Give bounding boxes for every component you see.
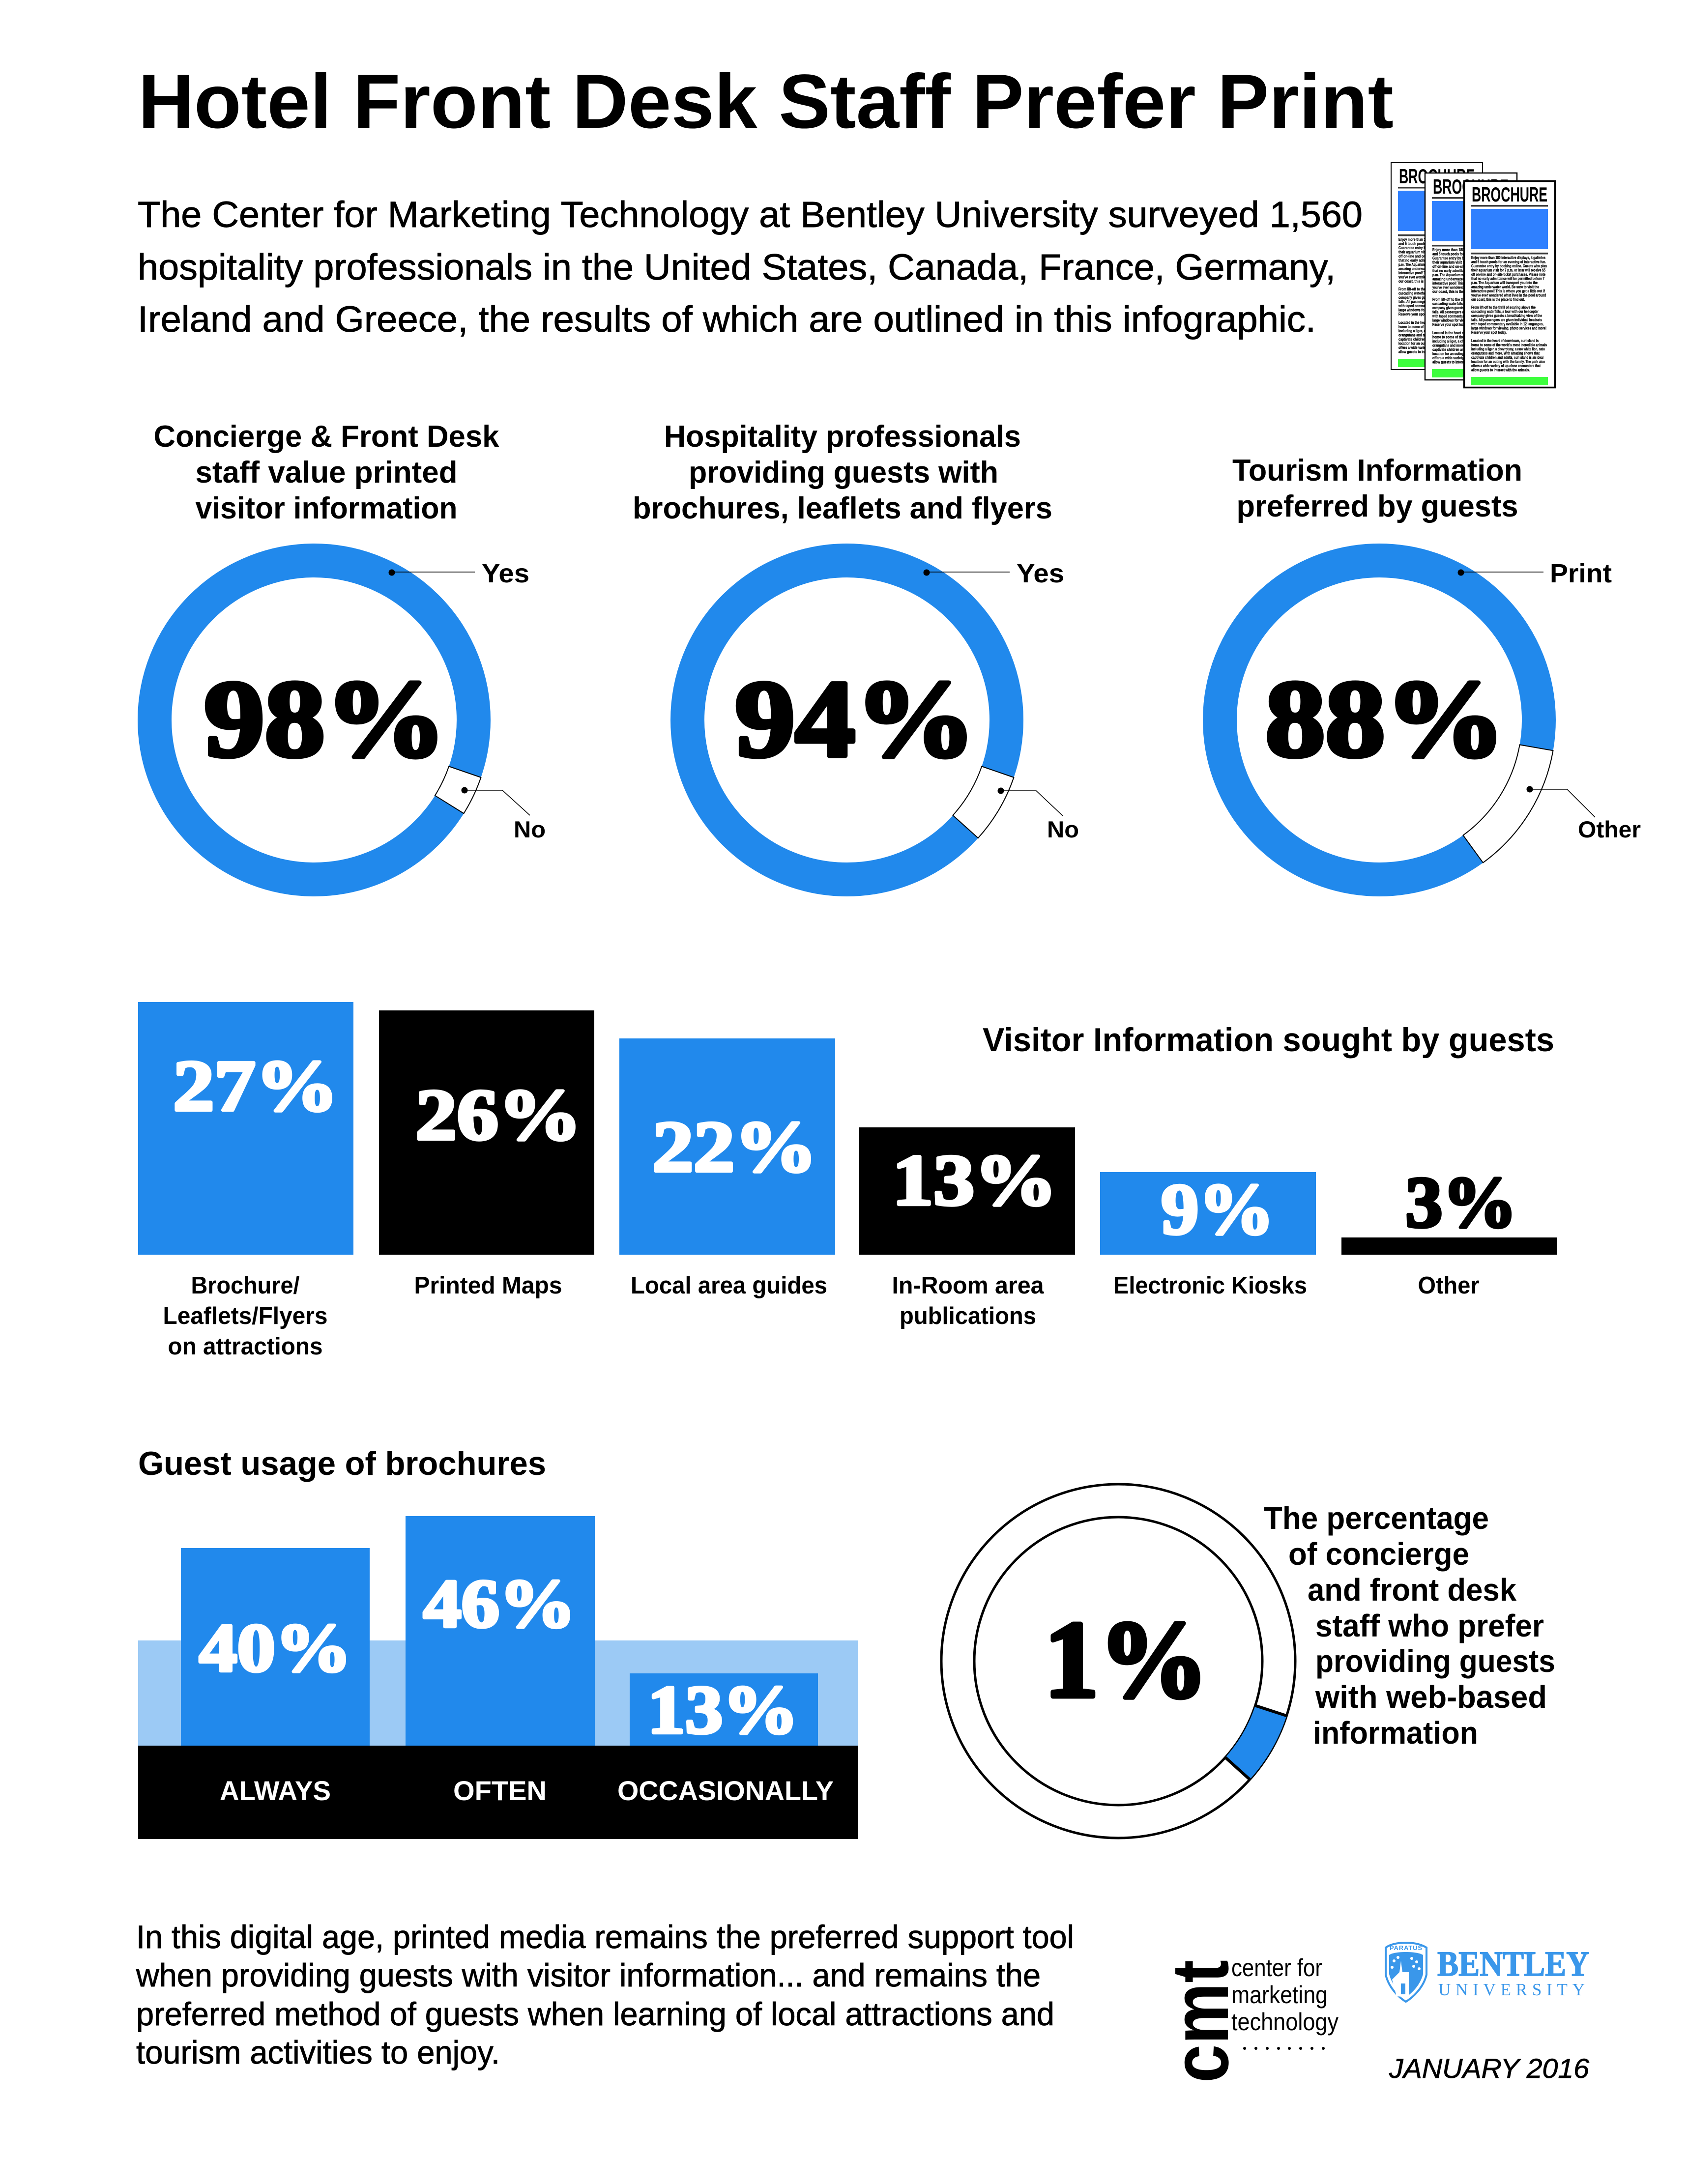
icon: front brochure: large windows for viewing, photo services and more! bbox=[1471, 325, 1546, 330]
icon: back brochure: home to some of t bbox=[1398, 324, 1426, 329]
icon: back brochure: From lift-off to the bbox=[1398, 287, 1426, 291]
logo: center for marketing technology: center for bbox=[1231, 1954, 1322, 1982]
panel: visitor information bar chart bbox=[138, 1002, 1557, 1360]
value 88%: 88% bbox=[1265, 658, 1505, 780]
icon: middle brochure: falls. All passengers a bbox=[1432, 310, 1464, 315]
bar: always 40%: ALWAYS bbox=[220, 1775, 331, 1806]
callout: other bbox=[1527, 786, 1641, 842]
icon: front brochure: Reserve your spot today. bbox=[1471, 330, 1507, 335]
description text: information bbox=[1313, 1715, 1478, 1751]
icon: back brochure: location for an out bbox=[1398, 341, 1426, 346]
bar labels: publications bbox=[900, 1303, 1036, 1329]
heading: tourism information bbox=[1232, 454, 1522, 523]
bar: 13% in-room bbox=[859, 1127, 1075, 1255]
icon: middle brochure: and 5 touch pools for bbox=[1432, 252, 1464, 257]
icon: back brochure: falls. All passenge bbox=[1398, 299, 1426, 304]
logo: center for marketing technology: marketing bbox=[1231, 1981, 1328, 2009]
callout: no: No bbox=[514, 816, 546, 842]
callout: other: Other bbox=[1578, 816, 1641, 842]
date: JANUARY 2016 bbox=[1389, 2053, 1590, 2084]
icon: middle brochure: From lift-off to the th bbox=[1432, 297, 1464, 302]
icon: middle brochure: including a liger, a ch bbox=[1432, 339, 1464, 344]
description text: providing guests bbox=[1315, 1643, 1555, 1679]
icon: middle brochure: interactive pool! This bbox=[1432, 281, 1464, 286]
icon: front brochure: home to some of the world's most incredible animals bbox=[1471, 342, 1547, 347]
description text: of concierge bbox=[1288, 1536, 1469, 1572]
intro text block bbox=[138, 194, 1363, 340]
bar: always 40% bbox=[181, 1548, 370, 1806]
heading: hospitality professionals: providing guests with bbox=[689, 456, 998, 489]
icon: middle brochure: BROCHURE bbox=[1433, 175, 1509, 198]
heading: guest usage: Guest usage of brochures bbox=[138, 1445, 546, 1482]
bar: occasionally 13%: OCCASIONALLY bbox=[617, 1775, 834, 1806]
bar: 3% other bbox=[1341, 1162, 1557, 1255]
icon: front brochure: with taped commentary available in 12 languages, bbox=[1471, 321, 1543, 326]
icon: back brochure: their aquarium vis bbox=[1398, 250, 1426, 255]
icon: middle brochure: home to some of the bbox=[1432, 334, 1464, 339]
icon: middle brochure: Guarantee entry by b bbox=[1432, 256, 1464, 260]
description text: staff who prefer bbox=[1315, 1608, 1544, 1643]
heading: hospitality professionals: Hospitality professionals bbox=[664, 420, 1021, 454]
bar labels: on attractions bbox=[168, 1333, 322, 1360]
callout: no bbox=[461, 787, 546, 842]
bar: occasionally 13% bbox=[617, 1672, 834, 1806]
icon: bentley shield bbox=[1386, 1943, 1426, 2002]
icon: back brochure: allow guests to int bbox=[1398, 349, 1426, 354]
callout: yes bbox=[923, 559, 1064, 588]
bar labels: In-Room area bbox=[892, 1272, 1044, 1299]
panel: guest usage of brochures bbox=[138, 1445, 858, 1839]
intro text block: The Center for Marketing Technology at Bentley University surveyed 1,560 bbox=[138, 194, 1363, 235]
icon: middle brochure: cascading waterfalls, bbox=[1432, 301, 1464, 306]
icon: middle brochure: you've ever wondered bbox=[1432, 285, 1464, 290]
value 94%: 94% bbox=[735, 658, 976, 780]
icon: middle brochure: off on-line and on-sit bbox=[1432, 264, 1464, 269]
icon: front brochure: BROCHURE bbox=[1472, 183, 1547, 206]
icon: back brochure: company gives gu bbox=[1398, 295, 1426, 300]
icon: back brochure: Reserve your spot bbox=[1398, 312, 1426, 316]
bar labels: Printed Maps bbox=[414, 1272, 562, 1299]
bar: always 40%: 40% bbox=[199, 1610, 351, 1686]
icon: back brochure: Located in the hea bbox=[1398, 320, 1426, 325]
heading: tourism information: Tourism Information bbox=[1232, 454, 1522, 488]
description text: with web-based bbox=[1315, 1679, 1547, 1715]
heading: concierge and front desk: Concierge & Front Desk bbox=[153, 420, 499, 454]
icon: back brochure: BROCHURE bbox=[1399, 165, 1475, 188]
icon: back brochure: that no early adm bbox=[1398, 258, 1426, 262]
icon: front brochure bbox=[1464, 181, 1555, 387]
background band bbox=[138, 1640, 858, 1746]
bar: 27% brochures bbox=[138, 1002, 353, 1255]
donut chart 98% bbox=[154, 560, 481, 880]
icon: middle brochure: captivate children an bbox=[1432, 347, 1464, 352]
base strip bbox=[138, 1746, 858, 1839]
heading: concierge and front desk bbox=[153, 420, 499, 525]
description text bbox=[1264, 1500, 1555, 1751]
icon: front brochure: Located in the heart of downtown, our island is bbox=[1471, 338, 1539, 343]
bar: 9% kiosks: 9% bbox=[1161, 1169, 1274, 1250]
callout: print: Print bbox=[1550, 559, 1612, 588]
description text: and front desk bbox=[1308, 1572, 1516, 1608]
value 98%: 98% bbox=[204, 658, 446, 780]
donut chart 94% bbox=[687, 560, 1014, 880]
icon: front brochure: off on-line and on-site ticket purchases. Please note bbox=[1471, 272, 1545, 277]
icon: front brochure: location for an outing with the family. The park also bbox=[1471, 359, 1545, 364]
bar labels bbox=[163, 1272, 1480, 1360]
bar labels: Local area guides bbox=[631, 1272, 827, 1299]
description text: The percentage bbox=[1264, 1500, 1489, 1536]
panel: hospitality professionals donut bbox=[633, 420, 1079, 880]
bar: 27% brochures: 27% bbox=[173, 1046, 338, 1126]
bar: 22% guides bbox=[619, 1038, 835, 1255]
bar labels: Leaflets/Flyers bbox=[163, 1303, 327, 1329]
bar: 26% maps: 26% bbox=[415, 1075, 582, 1155]
logo: center for marketing technology: technology bbox=[1231, 2008, 1339, 2036]
icon: back brochure: with taped comme bbox=[1398, 303, 1426, 308]
heading: hospitality professionals bbox=[633, 420, 1052, 525]
icon: front brochure: you've ever wondered what lives in the pool around bbox=[1471, 293, 1546, 298]
icon: front brochure: Enjoy more than 180 interactive displays, 4 galleries bbox=[1471, 255, 1545, 260]
heading: hospitality professionals: brochures, leaflets and flyers bbox=[633, 491, 1052, 525]
icon: front brochure: From lift-off to the thrill of soaring above the bbox=[1471, 305, 1536, 310]
panel: web-based information donut bbox=[941, 1484, 1555, 1838]
logo: bentley university bbox=[1386, 1943, 1589, 2002]
bar: often 46% bbox=[406, 1516, 595, 1806]
icon: front brochure: cascading waterfalls, a tour with our helicopter bbox=[1471, 309, 1539, 314]
bar: 13% in-room: 13% bbox=[892, 1140, 1057, 1221]
bar: often 46%: 46% bbox=[423, 1566, 576, 1642]
icon: middle brochure: location for an outing bbox=[1432, 351, 1464, 356]
icon: back brochure: our coast, this is t bbox=[1398, 279, 1426, 284]
icon: bentley shield: PARATUS bbox=[1390, 1944, 1422, 1952]
icon: middle brochure: Located in the heart o bbox=[1432, 330, 1464, 335]
title: Hotel Front Desk Staff Prefer Print bbox=[138, 59, 1394, 144]
icon: back brochure bbox=[1391, 163, 1483, 370]
closing text block: preferred method of guests when learning of local attractions and bbox=[136, 1996, 1054, 2032]
icon: middle brochure: amazing underwater bbox=[1432, 276, 1464, 281]
callout: no bbox=[998, 787, 1079, 842]
heading: concierge and front desk: visitor information bbox=[196, 491, 457, 525]
wordmark: university: UNIVERSITY bbox=[1438, 1980, 1585, 1999]
icon: back brochure: orangutans and m bbox=[1398, 332, 1426, 337]
bar: occasionally 13%: 13% bbox=[647, 1672, 798, 1748]
icon: front brochure: interactive pool! This is where you get a little wet if bbox=[1471, 288, 1545, 293]
panel: concierge donut bbox=[153, 420, 546, 880]
logo: center for marketing technology bbox=[1155, 1954, 1339, 2083]
icon: middle brochure: orangutans and more bbox=[1432, 343, 1464, 348]
icon: front brochure: offers a wide variety of up-close encounters that bbox=[1471, 363, 1541, 368]
intro text block: hospitality professionals in the United States, Canada, France, Germany, bbox=[138, 247, 1336, 287]
callout: yes: Yes bbox=[482, 559, 529, 588]
icon: stack of three brochures bbox=[1391, 163, 1555, 387]
intro text block: Ireland and Greece, the results of which are outlined in this infographic. bbox=[138, 299, 1316, 340]
icon: middle brochure: that no early admitta bbox=[1432, 268, 1464, 273]
icon: back brochure: p.m. The Aquarium bbox=[1398, 262, 1426, 267]
icon: back brochure: you've ever wonde bbox=[1398, 274, 1426, 279]
icon: middle brochure: company gives guests bbox=[1432, 305, 1464, 310]
icon: back brochure: amazing underwat bbox=[1398, 266, 1426, 271]
icon: middle brochure: p.m. The Aquarium w bbox=[1432, 272, 1464, 277]
icon: front brochure: including a liger, a chevrotany, a rare white lion, nate bbox=[1471, 346, 1545, 351]
icon: front brochure: Guarantee entry by booking online. Guests who plan bbox=[1471, 263, 1547, 268]
logo: center for marketing technology: cmt bbox=[1155, 1960, 1245, 2083]
closing text block: when providing guests with visitor information... and remains the bbox=[136, 1957, 1041, 1993]
bar: 9% kiosks bbox=[1100, 1169, 1316, 1255]
icon: back brochure: cascading waterfal bbox=[1398, 291, 1426, 296]
closing text block: In this digital age, printed media remains the preferred support tool bbox=[136, 1919, 1074, 1955]
icon: middle brochure: our coast, this is the bbox=[1432, 289, 1464, 294]
icon: front brochure: p.m. The Aquarium will transport you into the bbox=[1471, 280, 1538, 285]
icon: middle brochure: large windows for vie bbox=[1432, 317, 1464, 322]
icon: back brochure: interactive pool! T bbox=[1398, 270, 1426, 275]
icon: front brochure: orangutans and more. With amazing shows that bbox=[1471, 351, 1540, 356]
callout: no: No bbox=[1047, 816, 1079, 842]
icon: back brochure: Guarantee entry b bbox=[1398, 245, 1426, 250]
donut chart 1% bbox=[941, 1484, 1295, 1838]
icon: back brochure: large windows for bbox=[1398, 308, 1426, 313]
icon: middle brochure: their aquarium visit f bbox=[1432, 259, 1464, 264]
icon: front brochure: amazing underwater world. Be sure to visit the bbox=[1471, 284, 1539, 289]
icon: front brochure: and 5 touch pools for an evening of interactive fun. bbox=[1471, 259, 1546, 264]
bar: 22% guides: 22% bbox=[652, 1107, 817, 1187]
bar: often 46%: OFTEN bbox=[453, 1775, 547, 1806]
icon: middle brochure: Enjoy more than 180 bbox=[1432, 247, 1464, 252]
icon: front brochure: allow guests to interact with the animals. bbox=[1471, 368, 1530, 373]
icon: front brochure: our coast, this is the place to find out. bbox=[1471, 297, 1525, 302]
icon: back brochure: Enjoy more than 1 bbox=[1398, 237, 1426, 242]
bar labels: Brochure/ bbox=[191, 1272, 300, 1299]
icon: back brochure: off on-line and on bbox=[1398, 254, 1426, 259]
bar labels: Other bbox=[1418, 1272, 1480, 1299]
icon: middle brochure: with taped commentar bbox=[1432, 314, 1464, 318]
heading: tourism information: preferred by guests bbox=[1237, 489, 1518, 523]
icon: back brochure: captivate children bbox=[1398, 337, 1426, 342]
heading: concierge and front desk: staff value printed bbox=[196, 456, 457, 489]
icon: middle brochure: Reserve your spot tod bbox=[1432, 322, 1464, 327]
icon: front brochure: falls. All passengers are given individual headsets bbox=[1471, 317, 1542, 322]
donut chart 88% bbox=[1220, 560, 1553, 880]
callout: yes: Yes bbox=[1017, 559, 1064, 588]
wordmark: bentley: BENTLEY bbox=[1437, 1944, 1589, 1983]
panel: tourism information donut bbox=[1220, 454, 1641, 880]
icon: back brochure: offers a wide varie bbox=[1398, 345, 1426, 350]
icon: front brochure: that no early admittance will be permitted before 7 bbox=[1471, 276, 1544, 281]
closing text block bbox=[136, 1919, 1074, 2070]
icon: middle brochure: offers a wide variety bbox=[1432, 355, 1464, 360]
icon: front brochure: company gives guests a breathtaking view of the bbox=[1471, 313, 1542, 318]
callout: yes bbox=[388, 559, 529, 588]
icon: back brochure: including a liger, a bbox=[1398, 328, 1426, 333]
bar: 26% maps bbox=[379, 1010, 594, 1255]
icon: back brochure: and 5 touch pools bbox=[1398, 241, 1426, 246]
heading: visitor information sought: Visitor Information sought by guests bbox=[983, 1021, 1554, 1059]
icon: front brochure: captivate children and adults, our island is an ideal bbox=[1471, 355, 1543, 360]
icon: front brochure: their aquarium visit for 7 p.m. or later will receive $5 bbox=[1471, 267, 1545, 272]
bar labels: Electronic Kiosks bbox=[1113, 1272, 1307, 1299]
value 1%: 1% bbox=[1044, 1599, 1208, 1721]
callout: print bbox=[1458, 559, 1612, 588]
closing text block: tourism activities to enjoy. bbox=[136, 2034, 500, 2070]
icon: middle brochure: allow guests to intera bbox=[1432, 360, 1464, 365]
bar: 3% other: 3% bbox=[1405, 1162, 1517, 1243]
icon: middle brochure bbox=[1425, 173, 1517, 380]
